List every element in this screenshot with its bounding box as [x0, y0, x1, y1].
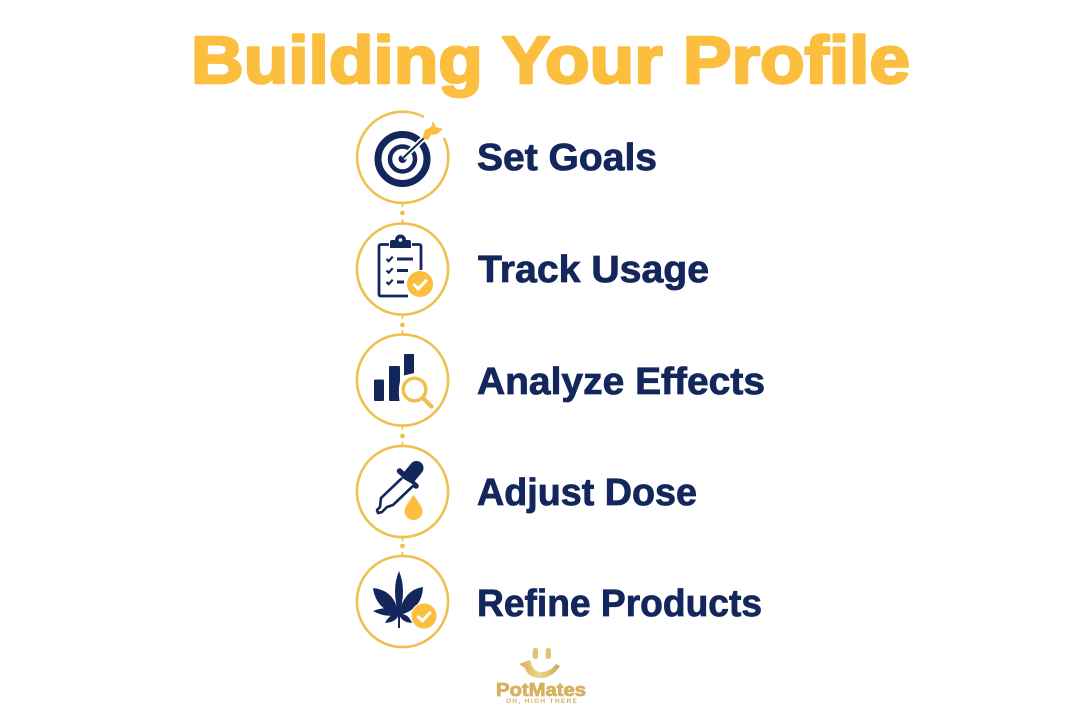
icon: smiley — [519, 648, 560, 678]
step 2: track usage — [357, 223, 709, 315]
label: adjust dose: Adjust Dose — [477, 472, 697, 514]
step 4: adjust dose — [357, 446, 697, 537]
step 3: analyze effects — [357, 334, 765, 426]
label: analyze effects: Analyze Effects — [477, 361, 765, 403]
title: Building Your Profile — [191, 23, 910, 98]
logo: PotMates — [496, 648, 586, 705]
connector: dose to products — [400, 537, 405, 556]
step 1: set goals — [357, 112, 657, 203]
connector: goals to usage — [400, 203, 405, 223]
icon: cannabis leaf with check — [357, 556, 448, 647]
logo wordmark: PotMates — [496, 680, 586, 700]
icon: bar chart with magnifier — [357, 334, 448, 426]
label: set goals: Set Goals — [477, 137, 657, 179]
logo tagline: OH, HIGH THERE — [506, 698, 578, 705]
connector: usage to effects — [400, 315, 405, 334]
connector: effects to dose — [400, 426, 405, 446]
label: refine products: Refine Products — [477, 583, 762, 625]
icon: dropper with drop — [357, 446, 448, 537]
step 5: refine products — [357, 556, 762, 647]
label: track usage: Track Usage — [478, 249, 709, 291]
icon: clipboard with check — [357, 223, 448, 315]
icon: target with arrow — [357, 112, 448, 203]
